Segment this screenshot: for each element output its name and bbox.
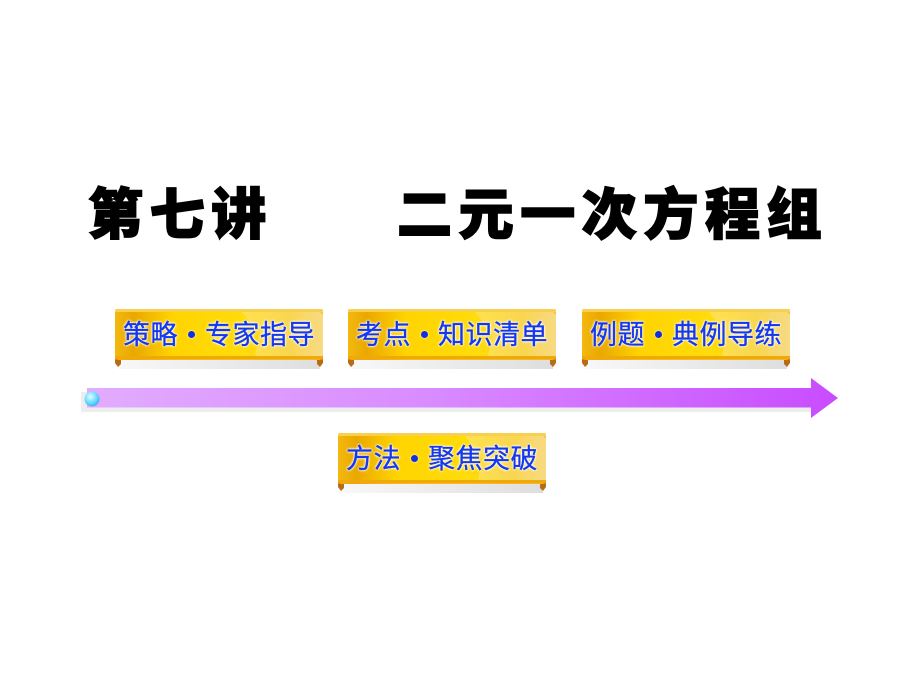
banner: methods: 方法 聚焦突破 <box>346 444 538 474</box>
banner: strategy: 策略 专家指导 <box>123 320 315 350</box>
banner: key points: 考点 知识清单 <box>356 320 548 350</box>
banner: examples <box>582 309 790 369</box>
banner: strategy <box>115 309 323 369</box>
banner: methods <box>338 433 546 493</box>
timeline arrow <box>81 378 838 418</box>
title: topic: 二元一次方程组 <box>397 184 828 246</box>
banner: examples: 例题 典例导练 <box>590 320 782 350</box>
banner: key points <box>348 309 556 369</box>
title: lecture number: 第七讲 <box>88 184 273 246</box>
